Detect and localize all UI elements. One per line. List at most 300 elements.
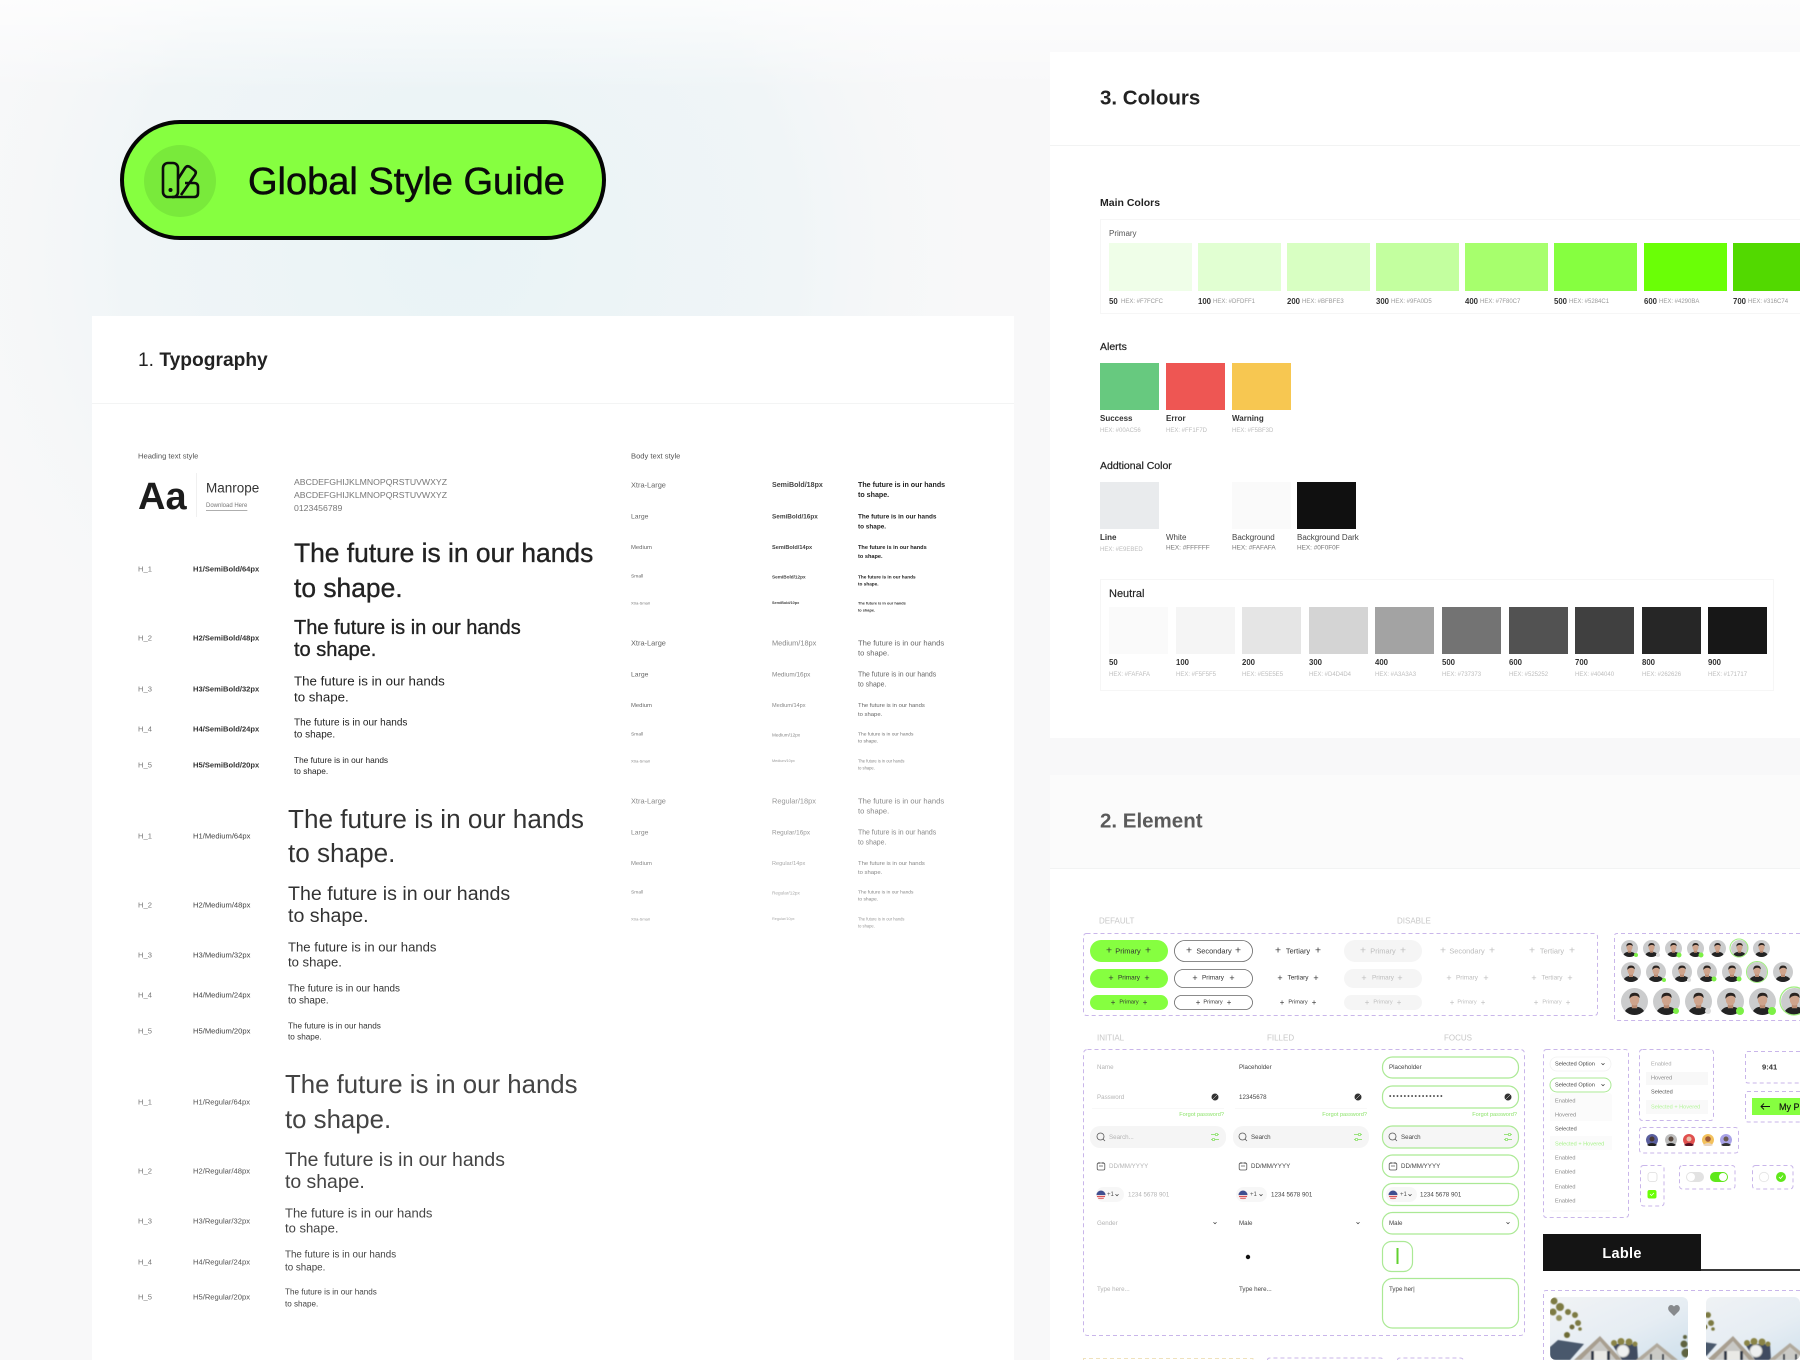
buttons row 2: +	[1313, 973, 1319, 983]
body samples: semibold: Small	[631, 574, 643, 580]
body samples: regular: to shape.	[858, 840, 886, 846]
alert swatches: HEX: #00AC56	[1100, 428, 1141, 434]
buttons block: DEFAULT	[1099, 916, 1135, 926]
heading samples: semibold: H2/SemiBold/48px	[193, 634, 260, 642]
heading: additional color: Addtional Color	[1100, 460, 1172, 472]
body samples: semibold: to shape.	[858, 608, 875, 612]
heading samples: medium: The future is in our hands	[288, 984, 400, 994]
panel: element	[1083, 812, 1800, 1360]
buttons block	[1084, 916, 1598, 1016]
heading: main colors: Main Colors	[1100, 197, 1160, 209]
heading samples: semibold: H4/SemiBold/24px	[193, 724, 260, 734]
primary palette	[1100, 220, 1800, 314]
input column: focus: Male	[1389, 1220, 1403, 1227]
heading samples: regular: to shape.	[285, 1171, 365, 1193]
input column: initial: Search...	[1109, 1134, 1134, 1141]
select dropdown: Selected + Hovered	[1555, 1142, 1604, 1148]
primary palette: 300	[1376, 297, 1390, 306]
buttons row 2: Primary	[1202, 974, 1225, 982]
heading samples: regular: H1/Regular/64px	[193, 1098, 250, 1106]
alert swatches: Success	[1100, 414, 1133, 423]
body samples: regular: to shape.	[858, 806, 889, 816]
heading samples: semibold: H_2	[138, 634, 152, 642]
panel: typography	[92, 316, 1014, 1360]
primary palette: HEX: #BFBFE3	[1302, 299, 1344, 305]
input fields block: FILLED	[1267, 1034, 1294, 1042]
body samples: regular: Medium	[631, 861, 652, 867]
lower block outlines	[1084, 1358, 1463, 1360]
body samples: medium: Medium/14px	[772, 703, 806, 709]
buttons row 1: Primary	[1370, 946, 1396, 956]
select dropdown: Hovered	[1555, 1112, 1576, 1118]
alert swatches	[1100, 363, 1291, 434]
body samples: medium: to shape.	[858, 682, 886, 688]
buttons row 3: +	[1227, 998, 1232, 1007]
body samples: semibold: Xtra-Large	[631, 480, 666, 490]
heading samples: medium: to shape.	[288, 1032, 322, 1042]
body samples: regular	[631, 796, 944, 928]
heading samples: regular: H4/Regular/24px	[193, 1258, 250, 1266]
buttons row 2	[1090, 969, 1573, 988]
tab: Lable	[1543, 1234, 1800, 1271]
primary palette: Primary	[1109, 229, 1137, 238]
additional swatches: Line	[1100, 533, 1117, 542]
select dropdown: Enabled	[1555, 1184, 1576, 1190]
select dropdown: Selected Option	[1555, 1082, 1595, 1088]
input column: focus: Search	[1401, 1134, 1421, 1141]
heading samples: medium: The future is in our hands	[288, 883, 510, 905]
font specimen: Manrope: Aa	[138, 476, 187, 518]
select dropdown: Enabled	[1555, 1098, 1576, 1104]
buttons block: DISABLE	[1397, 916, 1431, 926]
input column: filled	[1233, 1064, 1369, 1293]
status bar sample: 9:41	[1762, 1062, 1778, 1072]
input column: filled: Forgot password?	[1322, 1112, 1367, 1118]
body samples: regular: The future is in our hands	[858, 890, 914, 896]
heading samples: semibold: The future is in our hands	[294, 538, 593, 568]
additional swatches: White	[1166, 533, 1187, 542]
buttons row 1: Secondary	[1449, 946, 1485, 956]
select dropdown: Selected Option	[1555, 1062, 1595, 1068]
buttons row 3: +	[1365, 998, 1370, 1007]
heading samples: regular: The future is in our hands	[285, 1288, 377, 1296]
status bar sample	[1746, 1052, 1800, 1083]
neutral palette: 100	[1176, 658, 1190, 667]
input column: filled: Search	[1251, 1134, 1271, 1141]
primary palette: 600	[1644, 297, 1658, 306]
buttons row 1: +	[1400, 946, 1406, 956]
title badge: Global Style Guide: Global Style Guide	[248, 161, 565, 203]
additional swatches: HEX: #FFFFFF	[1166, 544, 1210, 552]
select dropdown: Selected	[1555, 1126, 1577, 1132]
buttons row 2: Primary	[1372, 974, 1395, 982]
neutral palette: 900	[1708, 658, 1722, 667]
buttons row 2: +	[1531, 973, 1537, 983]
input column: focus: DD/MM/YYYY	[1401, 1163, 1440, 1170]
buttons row 1: Tertiary	[1286, 946, 1310, 956]
heading: 1. Typography: 1. Typography	[138, 350, 268, 370]
body samples: regular: to shape.	[858, 870, 883, 876]
heading samples: medium: H_5	[138, 1026, 152, 1036]
toggle switches	[1680, 1166, 1735, 1189]
primary palette: HEX: #4290BA	[1659, 299, 1699, 305]
checkboxes	[1640, 1166, 1664, 1206]
primary palette: 100	[1198, 297, 1212, 306]
primary palette: HEX: #F7FCFC	[1121, 299, 1164, 305]
buttons row 1: +	[1106, 946, 1112, 956]
font specimen: Manrope: ABCDEFGHIJKLMNOPQRSTUVWXYZ	[294, 490, 448, 500]
heading samples: medium: H2/Medium/48px	[193, 900, 251, 910]
input column: filled: DD/MM/YYYY	[1251, 1163, 1290, 1170]
body samples: medium: The future is in our hands	[858, 672, 937, 678]
heading samples: medium: H3/Medium/32px	[193, 950, 251, 960]
neutral palette: Neutral	[1109, 588, 1144, 600]
input column: focus: Forgot password?	[1472, 1112, 1517, 1118]
input fields block: FOCUS	[1444, 1034, 1472, 1042]
buttons row 3: +	[1534, 998, 1539, 1007]
input column: filled: Type here...	[1239, 1286, 1272, 1293]
input column: initial: 1234 5678 901	[1128, 1192, 1170, 1198]
heading samples: regular: H3/Regular/32px	[193, 1216, 250, 1226]
heading samples: semibold	[138, 538, 593, 776]
buttons row 2: +	[1108, 973, 1114, 983]
buttons row 1	[1090, 940, 1575, 962]
body samples: semibold: Xtra-Small	[631, 600, 650, 606]
primary palette: HEX: #DFDFF1	[1213, 299, 1256, 305]
input column: initial: Name	[1097, 1064, 1114, 1071]
property cards	[1544, 1290, 1800, 1360]
input column: filled: Placeholder	[1239, 1064, 1272, 1071]
buttons row 3: Primary	[1119, 1000, 1139, 1006]
heading samples: semibold: to shape.	[294, 639, 376, 661]
buttons row 2: +	[1361, 973, 1367, 983]
buttons row 3: +	[1481, 998, 1486, 1007]
panel: colours	[1050, 52, 1800, 738]
body samples: medium: Medium	[631, 703, 652, 709]
buttons row 3: +	[1196, 998, 1201, 1007]
heading samples: semibold: The future is in our hands	[294, 674, 445, 688]
heading samples: regular: The future is in our hands	[285, 1206, 433, 1220]
buttons row 2: +	[1567, 973, 1573, 983]
card image 2	[1706, 1297, 1800, 1360]
neutral palette: 700	[1575, 658, 1589, 667]
body samples: medium: Large	[631, 672, 649, 678]
heading samples: semibold: The future is in our hands	[294, 755, 388, 765]
buttons row 3: +	[1397, 998, 1402, 1007]
alert swatches: Error	[1166, 414, 1186, 423]
heading: 3. Colours: 3. Colours	[1100, 86, 1200, 110]
primary palette: 200	[1287, 297, 1301, 306]
heading samples: regular	[138, 1071, 578, 1308]
buttons row 1: Secondary	[1196, 946, 1232, 956]
heading samples: semibold: to shape.	[294, 766, 328, 776]
heading samples: semibold: H_4	[138, 724, 152, 734]
buttons row 1: +	[1360, 946, 1366, 956]
heading samples: semibold: to shape.	[294, 730, 335, 740]
input column: initial	[1090, 1064, 1226, 1293]
input fields block: INITIAL	[1097, 1034, 1125, 1042]
buttons row 2: +	[1446, 973, 1452, 983]
buttons row 1: +	[1145, 946, 1151, 956]
body samples: regular: The future is in our hands	[858, 861, 925, 867]
buttons row 1: +	[1489, 946, 1495, 956]
buttons row 2: +	[1397, 973, 1403, 983]
title badge: Global Style Guide	[122, 122, 604, 238]
body samples: medium: to shape.	[858, 738, 878, 744]
body samples: semibold: SemiBold/16px	[772, 514, 818, 520]
buttons row 1: +	[1186, 946, 1192, 956]
heading samples: regular: H_4	[138, 1258, 152, 1266]
neutral palette: 400	[1375, 658, 1389, 667]
neutral palette: HEX: #737373	[1442, 672, 1482, 678]
heading samples: medium: The future is in our hands	[288, 940, 437, 954]
heading samples: regular: H_5	[138, 1292, 152, 1302]
body samples: semibold: to shape.	[858, 582, 879, 586]
input column: focus: •••••••••••••••	[1389, 1094, 1444, 1100]
alert swatches: HEX: #FF1F7D	[1166, 428, 1208, 434]
body samples: medium: to shape.	[858, 648, 889, 658]
body samples: semibold: The future is in our hands	[858, 545, 927, 551]
tab: Lable: Lable	[1602, 1246, 1642, 1262]
buttons row 3: Primary	[1288, 1000, 1308, 1006]
neutral palette: HEX: #F5F5F5	[1176, 672, 1217, 678]
heading samples: medium: H1/Medium/64px	[193, 832, 251, 840]
buttons row 2: Primary	[1118, 974, 1141, 982]
heading samples: semibold: The future is in our hands	[294, 617, 521, 639]
option list states: Enabled	[1651, 1062, 1672, 1068]
primary palette: HEX: #5284C1	[1569, 299, 1610, 305]
primary palette: 50	[1109, 297, 1118, 306]
input column: initial: Password	[1097, 1094, 1125, 1101]
heading samples: medium: H_2	[138, 900, 152, 910]
buttons row 2: +	[1192, 973, 1198, 983]
body samples: semibold: SemiBold/10px	[772, 601, 800, 605]
select dropdown: Enabled	[1555, 1198, 1576, 1204]
font specimen: Manrope: Manrope	[206, 480, 259, 496]
avatars block	[1614, 934, 1800, 1020]
select dropdown	[1544, 1050, 1628, 1218]
heading samples: semibold: H5/SemiBold/20px	[193, 760, 260, 770]
body samples: regular: Regular/12px	[772, 890, 801, 896]
body samples: medium: The future is in our hands	[858, 758, 904, 764]
additional swatches: HEX: #0F0F0F	[1297, 544, 1340, 552]
input fields block	[1084, 1034, 1524, 1336]
body samples: semibold: to shape.	[858, 491, 889, 499]
buttons row 3	[1090, 995, 1571, 1010]
buttons row 1: +	[1275, 946, 1281, 956]
heading samples: medium: H_4	[138, 990, 152, 1000]
buttons row 1: +	[1235, 946, 1241, 956]
primary palette: 400	[1465, 297, 1479, 306]
buttons row 2: +	[1229, 973, 1235, 983]
input column: filled: +1	[1250, 1192, 1258, 1198]
body samples: semibold: The future is in our hands	[858, 514, 937, 520]
body samples: regular: Small	[631, 890, 643, 896]
input column: initial: Type here...	[1097, 1286, 1130, 1293]
radio buttons	[1752, 1166, 1793, 1189]
body samples: medium: The future is in our hands	[858, 732, 914, 738]
buttons row 1: Tertiary	[1540, 946, 1564, 956]
option list states: Hovered	[1651, 1076, 1672, 1082]
body samples: semibold: Large	[631, 514, 649, 520]
body samples: regular: Regular/10px	[772, 917, 795, 921]
body samples: medium: Medium/10px	[772, 759, 795, 763]
body samples: medium	[631, 638, 944, 770]
heading samples: regular: H5/Regular/20px	[193, 1292, 250, 1302]
body samples: medium: The future is in our hands	[858, 638, 944, 648]
heading: 2. Element: 2. Element	[1100, 810, 1203, 832]
buttons row 1: +	[1315, 946, 1321, 956]
heading samples: regular: to shape.	[285, 1300, 318, 1308]
buttons row 3: Primary	[1373, 1000, 1393, 1006]
buttons row 3: +	[1143, 998, 1148, 1007]
heading samples: regular: to shape.	[285, 1106, 391, 1134]
heading samples: regular: to shape.	[285, 1262, 325, 1274]
heading samples: medium: to shape.	[288, 905, 369, 927]
input column: focus: 1234 5678 901	[1420, 1192, 1462, 1198]
input column: initial: DD/MM/YYYY	[1109, 1163, 1148, 1170]
body samples: regular: Regular/14px	[772, 861, 805, 867]
neutral palette: HEX: #171717	[1708, 672, 1748, 678]
body samples: regular: Regular/18px	[772, 796, 816, 806]
body samples: semibold: SemiBold/12px	[772, 574, 806, 580]
neutral palette: 200	[1242, 658, 1256, 667]
buttons row 2: +	[1144, 973, 1150, 983]
primary palette: HEX: #9FA0D5	[1391, 299, 1432, 305]
buttons row 3: Primary	[1457, 1000, 1477, 1006]
buttons row 3: +	[1111, 998, 1116, 1007]
font specimen: Manrope	[138, 473, 448, 518]
heading samples: semibold: H_1	[138, 564, 152, 574]
additional swatches: Background	[1232, 533, 1275, 542]
input column: initial: +1	[1107, 1192, 1115, 1198]
heading samples: medium: to shape.	[288, 954, 342, 970]
heading text style label: Heading text style	[138, 452, 198, 460]
heading samples: regular: H_1	[138, 1098, 152, 1106]
buttons row 2: Tertiary	[1288, 974, 1309, 982]
body samples: semibold: to shape.	[858, 524, 886, 530]
body samples: medium: to shape.	[858, 766, 875, 770]
buttons row 2: Tertiary	[1542, 974, 1563, 982]
neutral palette: HEX: #525252	[1509, 672, 1549, 678]
body samples: medium: Medium/18px	[772, 638, 817, 648]
body samples: medium: Xtra-Small	[631, 758, 650, 764]
heading samples: medium: to shape.	[288, 838, 395, 868]
heading samples: medium: H_1	[138, 832, 152, 840]
heading samples: medium: to shape.	[288, 996, 329, 1006]
body samples: semibold: The future is in our hands	[858, 481, 945, 489]
heading samples: medium: The future is in our hands	[288, 1022, 381, 1030]
body samples: medium: Xtra-Large	[631, 638, 666, 648]
heading samples: regular: H_2	[138, 1166, 152, 1176]
app bar sample	[1746, 1092, 1800, 1122]
body samples: regular: Xtra-Large	[631, 796, 666, 806]
body samples: semibold: SemiBold/14px	[772, 545, 813, 551]
body samples: semibold: The future is in our hands	[858, 574, 916, 580]
neutral palette: 50	[1109, 658, 1118, 667]
buttons row 2: +	[1483, 973, 1489, 983]
additional swatches: HEX: #E9EBED	[1100, 547, 1143, 553]
heading samples: semibold: H1/SemiBold/64px	[193, 564, 260, 574]
heading samples: semibold: The future is in our hands	[294, 718, 407, 728]
additional swatches: HEX: #FAFAFA	[1232, 544, 1276, 552]
body samples: regular: The future is in our hands	[858, 916, 904, 922]
body samples: medium: Medium/16px	[772, 672, 811, 678]
heading samples: medium: H_3	[138, 950, 152, 960]
buttons row 2: +	[1277, 973, 1283, 983]
body samples: regular: to shape.	[858, 924, 875, 928]
body samples: semibold: SemiBold/18px	[772, 481, 823, 489]
input column: filled: Male	[1239, 1220, 1253, 1227]
font specimen: Manrope: ABCDEFGHIJKLMNOPQRSTUVWXYZ	[294, 477, 448, 487]
select dropdown: Enabled	[1555, 1170, 1576, 1176]
heading samples: medium: H4/Medium/24px	[193, 990, 251, 1000]
buttons row 3: +	[1566, 998, 1571, 1007]
heading samples: regular: The future is in our hands	[285, 1250, 396, 1260]
neutral palette: 500	[1442, 658, 1456, 667]
body samples: medium: The future is in our hands	[858, 703, 925, 709]
heading samples: regular: to shape.	[285, 1220, 338, 1236]
buttons row 3: +	[1450, 998, 1455, 1007]
neutral palette: HEX: #262626	[1642, 672, 1682, 678]
neutral palette: HEX: #404040	[1575, 672, 1615, 678]
buttons row 1: +	[1569, 946, 1575, 956]
buttons row 3: +	[1312, 998, 1317, 1007]
neutral palette	[1100, 580, 1774, 690]
option list states: Selected + Hovered	[1651, 1104, 1700, 1110]
body samples: regular: Large	[631, 830, 649, 836]
alert swatches: HEX: #F5BF3D	[1232, 428, 1274, 434]
heading samples: regular: The future is in our hands	[285, 1149, 505, 1171]
additional swatches: Background Dark	[1297, 533, 1360, 542]
option list states: Selected	[1651, 1090, 1673, 1096]
heading samples: semibold: H3/SemiBold/32px	[193, 684, 260, 694]
buttons row 3: Primary	[1203, 1000, 1223, 1006]
heading samples: semibold: H_5	[138, 760, 152, 770]
heading samples: semibold: H_3	[138, 684, 152, 694]
buttons row 1: +	[1440, 946, 1446, 956]
font specimen: Manrope: Download Here	[206, 503, 248, 509]
body samples: semibold: Medium	[631, 545, 652, 551]
body samples: regular: Xtra-Small	[631, 916, 650, 922]
body samples: semibold: The future is in our hands	[858, 600, 906, 606]
body samples: regular: The future is in our hands	[858, 796, 944, 806]
font specimen: Manrope: 0123456789	[294, 503, 342, 513]
neutral palette: HEX: #FAFAFA	[1109, 672, 1150, 678]
card image 1	[1550, 1297, 1690, 1360]
buttons row 2: Primary	[1456, 974, 1479, 982]
heading samples: regular: The future is in our hands	[285, 1071, 578, 1099]
primary palette: 700	[1733, 297, 1747, 306]
primary palette: 500	[1554, 297, 1568, 306]
input column: filled: 1234 5678 901	[1271, 1192, 1313, 1198]
select dropdown: Enabled	[1555, 1156, 1576, 1162]
body samples: regular: to shape.	[858, 896, 878, 902]
heading samples: regular: H_3	[138, 1216, 152, 1226]
additional swatches	[1100, 482, 1360, 553]
heading samples: regular: H2/Regular/48px	[193, 1166, 250, 1176]
input column: filled: 12345678	[1239, 1094, 1267, 1101]
input column: focus: Placeholder	[1389, 1064, 1422, 1071]
input column: focus: Type her|	[1389, 1286, 1415, 1293]
body samples: medium: Small	[631, 732, 643, 738]
heading samples: semibold: to shape.	[294, 690, 349, 704]
input column: initial: Forgot password?	[1179, 1112, 1224, 1118]
input column: initial: Gender	[1097, 1220, 1118, 1227]
buttons row 3: +	[1280, 998, 1285, 1007]
neutral palette: 300	[1309, 658, 1323, 667]
icon: heart	[1668, 1305, 1680, 1316]
